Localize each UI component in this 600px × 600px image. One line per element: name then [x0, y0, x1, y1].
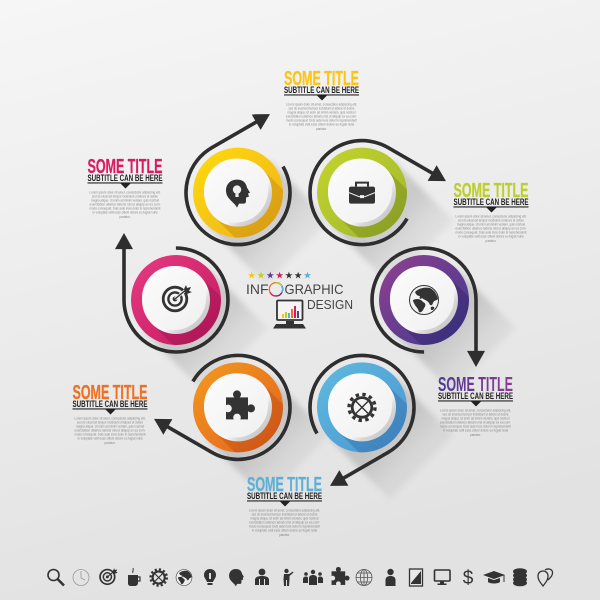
text block: orange title: exercitation ullamco laboris nisi ut aliquip ex ea com-: [74, 429, 146, 433]
text block: pink title: SUBTITLE CAN BE HERE: [88, 173, 162, 183]
panel: yellow step circle: [193, 148, 283, 238]
text block: pink title: in voluptate velit esse cillum dolore eu fugiat nulla: [92, 211, 158, 215]
icon: coin stack: [513, 568, 527, 586]
text block: orange title: Lorem ipsum dolor sit amet, consectetur adipiscing elit,: [74, 416, 146, 420]
icon: clock: [73, 570, 89, 586]
icon: monitor: [434, 570, 450, 585]
star rating row: ★: [247, 271, 256, 282]
text block: pink title: SOME TITLE: [88, 155, 162, 178]
text block: orange title: modo consequat. Duis aute irure dolor in reprehenderit: [74, 433, 146, 437]
panel: purple step circle: [379, 255, 469, 345]
text block: blue title: exercitation ullamco laboris nisi ut aliquip ex ea com-: [249, 521, 320, 525]
long shadows behind rings: [144, 161, 516, 499]
center logo: infographic design: [246, 271, 353, 328]
icon: gear: [349, 394, 375, 420]
text block: orange title: pariatur.: [104, 441, 116, 445]
icon: globe: [410, 286, 438, 314]
text block: yellow title: sed do eiusmod tempor incididunt ut labore et dolore: [288, 106, 355, 110]
text block: yellow title: pariatur.: [316, 127, 327, 131]
icon: puzzle piece: [224, 390, 255, 421]
text block: blue title: SUBTITLE CAN BE HERE: [247, 491, 322, 501]
text block: green title: magna aliqua. Ut enim ad minim veniam, quis nostrud: [457, 223, 525, 227]
text block: purple title: magna aliqua. Ut enim ad minim veniam, quis nostrud: [442, 417, 510, 421]
text block: purple title: pariatur.: [470, 433, 481, 437]
text block: pink title: exercitation ullamco laboris nisi ut aliquip ex ea com-: [90, 203, 160, 207]
text block: pink title: magna aliqua. Ut enim ad minim veniam, quis nostrud: [91, 199, 159, 203]
star rating row: ★: [275, 271, 284, 282]
star rating row: [247, 271, 312, 282]
text block: yellow title: exercitation ullamco laboris nisi ut aliquip ex ea com-: [286, 115, 357, 119]
icon: globe: [176, 570, 192, 585]
text block: orange title: SUBTITLE CAN BE HERE: [72, 399, 148, 409]
icon: wire globe: [356, 570, 372, 586]
text block: blue title: modo consequat. Duis aute irure dolor in reprehenderit: [249, 525, 320, 529]
arrow: orange step spiral: [144, 336, 309, 492]
text block: yellow title: SOME TITLE: [284, 67, 359, 90]
icon: head with light bulb: [226, 180, 250, 208]
arrow: yellow step spiral: [186, 114, 290, 245]
text block: green title: in voluptate velit esse cillum dolore eu fugiat nulla: [458, 235, 524, 239]
star rating row: ★: [303, 271, 312, 282]
text block: green title: exercitation ullamco laboris nisi ut aliquip ex ea com-: [456, 227, 526, 231]
text block: green title: SOME TITLE: [454, 179, 528, 202]
icon: dollar sign: $: [463, 568, 474, 589]
icon: head silhouette: [229, 569, 244, 586]
text block: pink title: sed do eiusmod tempor incididunt ut labore et dolore: [92, 194, 158, 198]
icon: light bulb: [204, 569, 216, 585]
panel: orange step circle: [193, 362, 283, 452]
text block: green title: modo consequat. Duis aute irure dolor in reprehenderit: [456, 231, 527, 235]
text block: green title: Lorem ipsum dolor sit amet, consectetur adipiscing elit,: [456, 214, 527, 218]
icon: coffee cup: [128, 568, 140, 586]
text block: purple title: in voluptate velit esse cillum dolore eu fugiat nulla: [443, 429, 508, 433]
text block: blue title: SOME TITLE: [247, 473, 322, 496]
heading: INF: INF: [246, 281, 268, 297]
text block: yellow title: Lorem ipsum dolor sit amet, consectetur adipiscing elit,: [286, 102, 357, 106]
text block: blue title: magna aliqua. Ut enim ad minim veniam, quis nostrud: [250, 517, 319, 521]
heading: DESIGN: DESIGN: [307, 297, 353, 312]
icon: coloured O ring: [269, 283, 283, 296]
text block: orange title: SOME TITLE: [72, 381, 148, 404]
arrow: green step spiral: [291, 108, 456, 264]
text block: purple title: SOME TITLE: [438, 373, 513, 396]
text block: yellow title: SUBTITLE CAN BE HERE: [284, 85, 359, 95]
text block: orange title: [72, 381, 148, 445]
heading: GRAPHIC: GRAPHIC: [284, 281, 344, 297]
text block: yellow title: [284, 67, 359, 131]
icon row: bottom toolbar: [48, 567, 553, 589]
text block: green title: sed do eiusmod tempor incididunt ut labore et dolore: [458, 218, 524, 222]
text block: purple title: exercitation ullamco laboris nisi ut aliquip ex ea com-: [440, 421, 511, 425]
text block: yellow title: magna aliqua. Ut enim ad minim veniam, quis nostrud: [288, 111, 356, 115]
text block: green title: [454, 179, 528, 243]
text block: yellow title: modo consequat. Duis aute irure dolor in reprehenderit: [286, 119, 357, 123]
text block: purple title: [438, 373, 513, 437]
star rating row: ★: [266, 271, 275, 282]
text block: blue title: in voluptate velit esse cillum dolore eu fugiat nulla: [252, 529, 317, 533]
text block: blue title: pariatur.: [279, 533, 290, 537]
panel: blue step circle: [317, 362, 407, 452]
text block: purple title: modo consequat. Duis aute irure dolor in reprehenderit: [440, 425, 511, 429]
text block: pink title: Lorem ipsum dolor sit amet, consectetur adipiscing elit,: [90, 190, 161, 194]
icon: team group: [303, 570, 323, 585]
star rating row: ★: [285, 271, 294, 282]
text block: purple title: Lorem ipsum dolor sit amet, consectetur adipiscing elit,: [440, 408, 511, 412]
text block: purple title: SUBTITLE CAN BE HERE: [438, 391, 513, 401]
icon: gear: [151, 569, 167, 586]
arrow: purple step spiral: [353, 229, 518, 384]
icon: map pins: [538, 569, 553, 586]
text block: orange title: sed do eiusmod tempor incididunt ut labore et dolore: [77, 420, 143, 424]
panel: green step circle: [317, 148, 407, 238]
icon: graduation cap: [483, 571, 505, 584]
arrow: pink step spiral: [82, 216, 247, 371]
text block: green title: SUBTITLE CAN BE HERE: [454, 197, 528, 207]
text block: blue title: [247, 473, 322, 537]
icon: briefcase: [349, 183, 375, 204]
text block: yellow title: in voluptate velit esse cillum dolore eu fugiat nulla: [289, 123, 354, 127]
icon: target with arrow: [163, 285, 192, 311]
star rating row: ★: [257, 271, 266, 282]
text block: purple title: sed do eiusmod tempor incididunt ut labore et dolore: [442, 412, 509, 416]
text block: orange title: magna aliqua. Ut enim ad minim veniam, quis nostrud: [76, 425, 144, 429]
icon: businessman bust: [255, 569, 269, 585]
text block: pink title: modo consequat. Duis aute irure dolor in reprehenderit: [90, 207, 161, 211]
arrow: blue step spiral: [310, 355, 414, 486]
icon: monitor with bar chart: [273, 300, 306, 328]
text block: blue title: Lorem ipsum dolor sit amet, consectetur adipiscing elit,: [249, 508, 320, 512]
icon: presenter: [284, 569, 294, 586]
icon: user: [386, 569, 396, 586]
text block: blue title: sed do eiusmod tempor incididunt ut labore et dolore: [252, 512, 318, 516]
panel: pink step circle: [131, 255, 221, 345]
text block: green title: pariatur.: [486, 239, 497, 243]
text block: pink title: [88, 155, 162, 219]
icon: magnifier: [48, 570, 64, 586]
icon: target: [100, 568, 118, 584]
star rating row: ★: [294, 271, 303, 282]
icon: puzzle: [330, 567, 350, 586]
text block: pink title: pariatur.: [120, 215, 131, 219]
icon: tablet chart: [410, 569, 422, 586]
text block: orange title: in voluptate velit esse cillum dolore eu fugiat nulla: [78, 437, 143, 441]
